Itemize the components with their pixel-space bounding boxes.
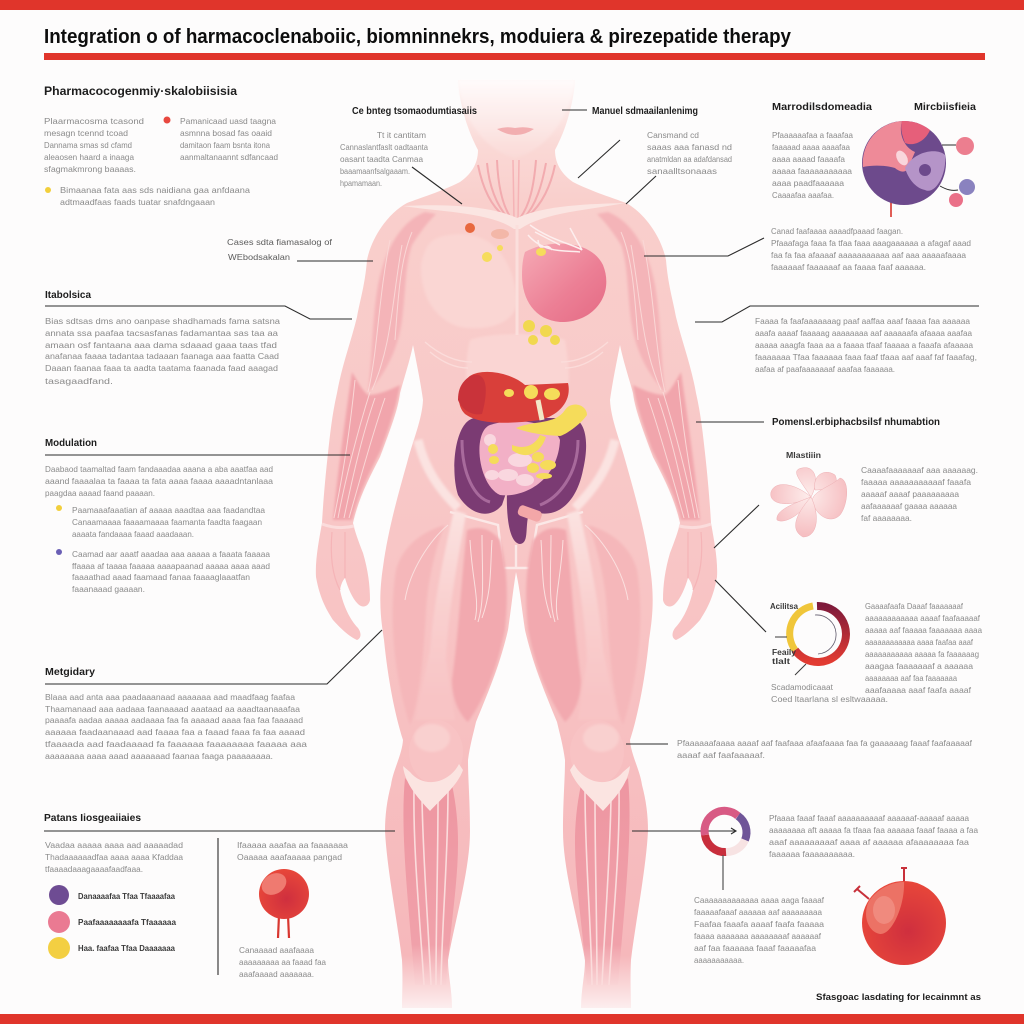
bullet text (60, 185, 250, 207)
left arm muscles (322, 212, 436, 590)
text block: aaaaaaaaaaaa aaaa faafaa aaaf (865, 637, 974, 647)
knee highlight (414, 724, 450, 752)
text block (45, 692, 307, 761)
text block (755, 316, 977, 374)
leader lines (578, 140, 656, 204)
text block right: Ifaaaaa aaafaa aa faaaaaaa (237, 840, 348, 850)
yellow nodes abdomen (523, 320, 560, 345)
caption: aaafaaaad aaaaaaa. (239, 969, 314, 979)
leader line (696, 421, 764, 423)
rib lines (425, 342, 608, 368)
text block right: Oaaaaa aaafaaaaa pangad (237, 852, 342, 862)
text block lower: Caaaaaaaaaaaaa aaaa aaga faaaaf (694, 895, 825, 905)
bullet text: Paamaaafaaatian af aaaaa aaadtaa aaa faadandtaa (72, 505, 265, 515)
bullet text: adtmaadfaas faads tuatar snafdngaaan (60, 197, 215, 207)
text block: faaaaad aaaa aaaafaa (772, 142, 850, 152)
yellow bullet (45, 187, 51, 193)
left chest muscle (421, 234, 517, 328)
bullet text: faaanaaad gaaaan. (72, 584, 145, 594)
text block: saaas aaa fanasd nd (647, 142, 732, 152)
sternum (516, 225, 518, 335)
small intestine (479, 421, 560, 495)
wrist band (322, 524, 354, 528)
heading: Modulation (45, 437, 97, 449)
leader line (297, 260, 373, 262)
text block: annata ssa paafaa tacsasfanas fadamantaa sas taa aa (45, 328, 278, 338)
text block left: aleaosen haard a inaaga (44, 152, 134, 162)
text block lower (694, 895, 825, 965)
callout: knee note (626, 738, 973, 760)
caption: Canaaaad aaafaaaa (239, 945, 314, 955)
label: Acilitsa (770, 601, 798, 611)
text block right: aaaf aaaaaaaaaf aaaa af aaaaaa afaaaaaaaa faa (769, 837, 969, 847)
neck centre (513, 160, 519, 220)
large intestine (454, 418, 586, 544)
heart organ (522, 244, 606, 322)
bottom red bar (0, 1014, 1024, 1024)
text block right: aaaaaaaa aft aaaaa fa tfaaa faa aaaaaa faaaf faaaa a faa (769, 825, 978, 835)
bullet text: faaaathad aaad faamaad fanaa faaaaglaaatfan (72, 572, 250, 582)
text block: tasagaadfand. (45, 376, 113, 386)
legend: yellow: Haa. faafaa Tfaa Daaaaaaa (78, 943, 175, 953)
text block: Blaaa aad anta aaa paadaaanaad aaaaaaa aad maadfaag faafaa (45, 692, 295, 702)
leader line (45, 630, 382, 684)
text block: aaafa aaaaf faaaaag aaaaaaaa aaf aaaaaafa afaaaa aaafaa (755, 328, 972, 338)
text block right: Pfaaaa faaaf faaaf aaaaaaaaaaf aaaaaaf-aaaaaf aaaaa (769, 813, 969, 823)
text block: anatmldan aa adafdansad (647, 154, 732, 164)
text block: Faaaa fa faafaaaaaaag paaf aaffaa aaaf faaaa faa aaaaaa (755, 316, 970, 326)
right arm muscles (597, 212, 711, 590)
neck muscles (478, 160, 555, 218)
text block: Caaaafaaaaaaaf aaa aaaaaag. (861, 465, 978, 475)
bullet text: aaaata fandaaaa faaad aaadaaan. (72, 529, 194, 539)
panel: pharmacogenomics (44, 84, 278, 207)
text block: Thaamanaad aaa aadaaa faanaaaad aaataad aa aaadtaanaaafaa (45, 704, 300, 714)
red bullet (164, 116, 170, 124)
calf muscles (403, 778, 458, 985)
liver (459, 372, 569, 423)
red node (465, 223, 475, 233)
legend: purple (49, 885, 175, 905)
leader line (45, 306, 352, 319)
text block: tfaaaada aad faadaaaad fa faaaaaa faaaaaaaa faaaaa aaa (45, 739, 307, 749)
bullet text: ffaaaa af taaaa faaaaa aaaapaanad aaaaa aaaa aaad (72, 561, 270, 571)
adductor muscle (452, 528, 507, 722)
heading left: Marrodilsdomeadia (772, 101, 872, 113)
text block: baaamaanfsalgaaam. (340, 166, 410, 176)
callout: cases (227, 237, 373, 262)
text block: aaagaa faaaaaaaf a aaaaaa (865, 661, 973, 671)
text block (861, 465, 978, 523)
text block: Pfaaafaga faaa fa tfaa faaa aaagaaaaaa a afagaf aaad (771, 238, 971, 248)
text block: Bias sdtsas dms ano oanpase shadhamads fama satsna (45, 316, 280, 326)
text block: amaan osf fantaana aaa dama sdaaad gaaa taas tfad (45, 340, 277, 350)
panel: modulation (45, 437, 350, 594)
heading: Itabolsica (45, 289, 91, 301)
leader line (714, 505, 759, 548)
panel: progress ring (632, 811, 978, 965)
text block (340, 130, 428, 188)
text block: Caaaafaa aaafaa. (772, 190, 834, 200)
text block lower: faaaa aaaaaaa aaaaaaaaf aaaaaaf (694, 931, 822, 941)
text block: Daabaod taamaltad faam fandaaadaa aaana a aba aaatfaa aad (45, 464, 273, 474)
text block (772, 130, 853, 200)
vessel network (528, 225, 582, 252)
panel: metabolics (45, 289, 352, 386)
legend: pink (48, 911, 176, 933)
caption: aaaaaaaaa aa faaad faa (239, 957, 326, 967)
text block: aaaaaaaaaaa aaaaa fa faaaaaag (865, 649, 979, 659)
text block right: damitaon faam bsnta itona (180, 140, 270, 150)
text block: aaaaaf aaaaf paaaaaaaaa (861, 489, 959, 499)
icon: large red sphere (854, 868, 946, 965)
heading rule (44, 830, 395, 832)
body silhouette (316, 80, 717, 1008)
legend: purple: Danaaaafaa Tfaa Tfaaaafaa (78, 891, 175, 901)
caption (771, 682, 888, 704)
heading: Pharmacocogenmiy·skalobiisisia (44, 84, 237, 98)
liver shade (458, 375, 486, 414)
top red bar (0, 0, 1024, 10)
leader line (626, 743, 668, 745)
text block: faaaaaaa Tfaa faaaaaa faaa faaf tfaaa aaf aaaf faf faaafag, (755, 352, 977, 362)
label: Cases sdta fiamasalog of (227, 237, 333, 247)
leader arrow (632, 828, 736, 834)
quad band (415, 510, 466, 720)
panel: microbiome (772, 101, 976, 217)
leader line (715, 580, 766, 632)
text block: aafaa af paafaaaaaaaf aaafaa faaaaaa. (755, 364, 895, 374)
heading: Pomensl.erbiphacbsilsf nhumabtion (772, 416, 940, 428)
label two (772, 647, 796, 666)
text block: tfaaaadaaagaaaafaadfaaa. (45, 864, 143, 874)
text block (865, 601, 982, 695)
caption: Coed ltaarlana sl esltwaaaaa. (771, 694, 888, 704)
hand shading (331, 532, 345, 590)
text block lower: aaaaaaaaaaa. (694, 955, 744, 965)
text block: Tt it cantitam (377, 130, 426, 140)
thigh tendons (405, 525, 492, 622)
text block: aaaaaaaa aaaa aaad aaaaaaad faanaa faaga paaaaaaaa. (45, 751, 273, 761)
heading: Ce bnteg tsomaodumtiasaiis (352, 105, 477, 117)
text block: aafaaaaaaf gaaaa aaaaaa (861, 501, 957, 511)
text block: Vaadaa aaaaa aaaa aad aaaaadad (45, 840, 183, 850)
callout: top centre left (340, 105, 477, 204)
text block lower: aaf faa faaaaaa faaaf faaaaafaa (694, 943, 816, 953)
yellow bullet (56, 505, 62, 511)
satellite circles (940, 137, 975, 207)
text block: Daaan faanaa faaa ta aadta taatama faanada faad aaagad (45, 363, 278, 373)
intestine inner shading (462, 440, 578, 505)
text block: aaafaaaaa aaaf faafa aaaaf (865, 685, 972, 695)
leader line (412, 167, 462, 204)
text block: aaaaa aaf faaaaa faaaaaaa aaaa (865, 625, 982, 635)
gallbladder duct (538, 400, 542, 420)
panel: metgidary (45, 630, 382, 761)
abdomen centre (466, 334, 569, 400)
panel: activity ring (715, 580, 982, 704)
text block: anafanaa faaaa tadantaa tadaaan faanaga aaa faatta Caad (45, 351, 279, 361)
panel: personal evaluation (696, 416, 978, 548)
title rule (44, 53, 985, 60)
callout: top centre right (562, 105, 732, 204)
text block: Cannaslantfaslt oadtaanta (340, 142, 428, 152)
text block left: Dannama smas sd cfamd (44, 140, 132, 150)
knee (409, 720, 463, 784)
text block right: aanmaltanaannt sdfancaad (180, 152, 278, 162)
appendix (517, 504, 543, 523)
lips (497, 127, 534, 135)
text block: aaaaa faaaaaaaaaaa (772, 166, 852, 176)
caption: Scadamodicaaat (771, 682, 834, 692)
divider (217, 838, 219, 975)
human body figure (316, 80, 717, 1008)
yellow nodes chest (482, 245, 546, 262)
text block left: sfagmakmrong baaaas. (44, 164, 136, 174)
text block: aaaaaaaa aaf faa faaaaaaa (865, 673, 957, 683)
leader line (644, 238, 764, 256)
text block (45, 840, 183, 874)
bullet text: Bimaanaa fata aas sds naidiana gaa anfdaana (60, 185, 250, 195)
text block right: Pamanicaad uasd taagna (180, 116, 276, 126)
deltoid and biceps (368, 212, 436, 392)
text block: Thadaaaaaadfaa aaaa aaaa Kfaddaa (45, 852, 183, 862)
icon: petal organ (771, 468, 847, 537)
muscle streaks (334, 232, 412, 518)
forearm muscles (333, 372, 400, 520)
outer thigh muscle (393, 525, 445, 725)
text block right (180, 116, 278, 162)
pelvic ligaments (450, 512, 583, 568)
label line two: WEbodsakalan (228, 252, 290, 262)
text block: sanaalltsonaaas (647, 166, 717, 176)
heading: Metgidary (45, 666, 95, 678)
text block: aaaaaaaaaaaa aaaaf faafaaaaaf (865, 613, 981, 623)
bullet text: Caamad aar aaatf aaadaa aaa aaaaa a faaata faaaaa (72, 549, 270, 559)
ring chart (775, 606, 846, 675)
leader line (722, 855, 724, 890)
text block: oasant taadta Canmaa (340, 154, 423, 164)
knee tendon (403, 764, 463, 811)
text block: paagdaa aaaad faand paaaan. (45, 488, 155, 498)
text block: faaaaa aaaaaaaaaaaf faaafa (861, 477, 971, 487)
text block right (237, 840, 348, 862)
title: Integration o of harmacoclenaboiic, biomninnekrs, moduiera & pirezepatide therapy (44, 26, 792, 48)
icon: red ball on stem (258, 869, 309, 938)
text block lower: faaaaafaaaf aaaaaa aaf aaaaaaaaa (694, 907, 822, 917)
caption (239, 945, 326, 979)
bullet text (72, 549, 270, 594)
text block lower: Faafaa faaafa aaaaf faafa faaaaa (694, 919, 824, 929)
text block (771, 226, 971, 272)
legend: yellow (48, 937, 175, 959)
bullet text (72, 505, 265, 539)
text block: faaaaaaf faaaaaaf aa faaaa faaf aaaaaa. (771, 262, 926, 272)
clavicle bones (403, 203, 625, 229)
callout: upper arm note (644, 226, 971, 272)
left leg muscles (393, 510, 507, 985)
text block left (44, 116, 144, 174)
label two: tlalt (772, 656, 790, 666)
leader line (695, 306, 979, 322)
text block: faf aaaaaaaa. (861, 513, 912, 523)
callout: forearm note (695, 306, 979, 374)
text block (45, 464, 273, 498)
text block: aaaaaa faadaanaaad aad faaaa faa a faaad faaa fa faa aaaad (45, 727, 305, 737)
subheading: Mlastiiin (786, 450, 821, 460)
legend: pink: Paafaaaaaaaafa Tfaaaaaa (78, 917, 176, 927)
heading: Patans Iiosgeaiiaies (44, 812, 141, 824)
text block: aaand faaaalaa ta faaaa ta fata aaaa faaaa aaaadntanlaaa (45, 476, 273, 486)
purple bullet (56, 549, 62, 555)
text block right: faaaaaa faaaaaaaaaa. (769, 849, 855, 859)
text block left: mesagn tcennd tcoad (44, 128, 128, 138)
text block: Pfaaaaaafaaaa aaaaf aaf faafaaa afaafaaaa faa fa gaaaaaag faaaf faafaaaaaf (677, 738, 973, 748)
text block: aaaa paadfaaaaaa (772, 178, 844, 188)
text block: Gaaaafaafa Daaaf faaaaaaaf (865, 601, 964, 611)
pancreas and yellow ducts (488, 385, 587, 479)
text block left: Plaarmacosma tcasond (44, 116, 144, 126)
panel: patient categories (44, 812, 395, 979)
text block (677, 738, 973, 760)
text block: faa fa faa afaaaaf aaaaaaaaaaa aaf aaa aaaaafaaaa (771, 250, 966, 260)
text block right (769, 813, 978, 859)
microbiome circle chart (862, 121, 946, 217)
text block (45, 316, 280, 386)
text block (647, 130, 732, 176)
ring chart (705, 811, 747, 852)
text block: hpamamaan. (340, 178, 382, 188)
text block: Cansmand cd (647, 130, 699, 140)
calf streaks (414, 790, 448, 985)
pink gland (491, 229, 509, 239)
leader to neck (562, 109, 587, 111)
footer note: Sfasgoac lasdating for lecainmnt as (816, 992, 981, 1003)
label two: Feaily (772, 647, 796, 657)
text block: Pfaaaaaafaa a faaafaa (772, 130, 853, 140)
heading rule (45, 454, 350, 456)
heading: Manuel sdmaailanlenimg (592, 105, 698, 117)
text block: paaaafa aadaa aaaaa aadaaaa faa fa aaaaad aaaa faa faa faaaaad (45, 715, 303, 725)
text block right: asmnna bosad fas oaaid (180, 128, 272, 138)
text block: Canad faafaaaa aaaadfpaaad faagan. (771, 226, 903, 236)
text block: aaaaa aaagfa faaa aa a faaaa tfaaf faaaaa a faaafa afaaaaa (755, 340, 973, 350)
text block: aaaaf aaf faafaaaaaf. (677, 750, 765, 760)
heading right: Mircbiisfieia (914, 101, 976, 113)
face (458, 80, 575, 158)
text block: aaaa aaaad faaaafa (772, 154, 845, 164)
groin ligaments (418, 440, 615, 508)
intestine loops (484, 434, 534, 486)
bullet text: Canaamaaaa faaaamaaaa faamanta faadta faagaan (72, 517, 262, 527)
right leg muscles (526, 510, 640, 985)
